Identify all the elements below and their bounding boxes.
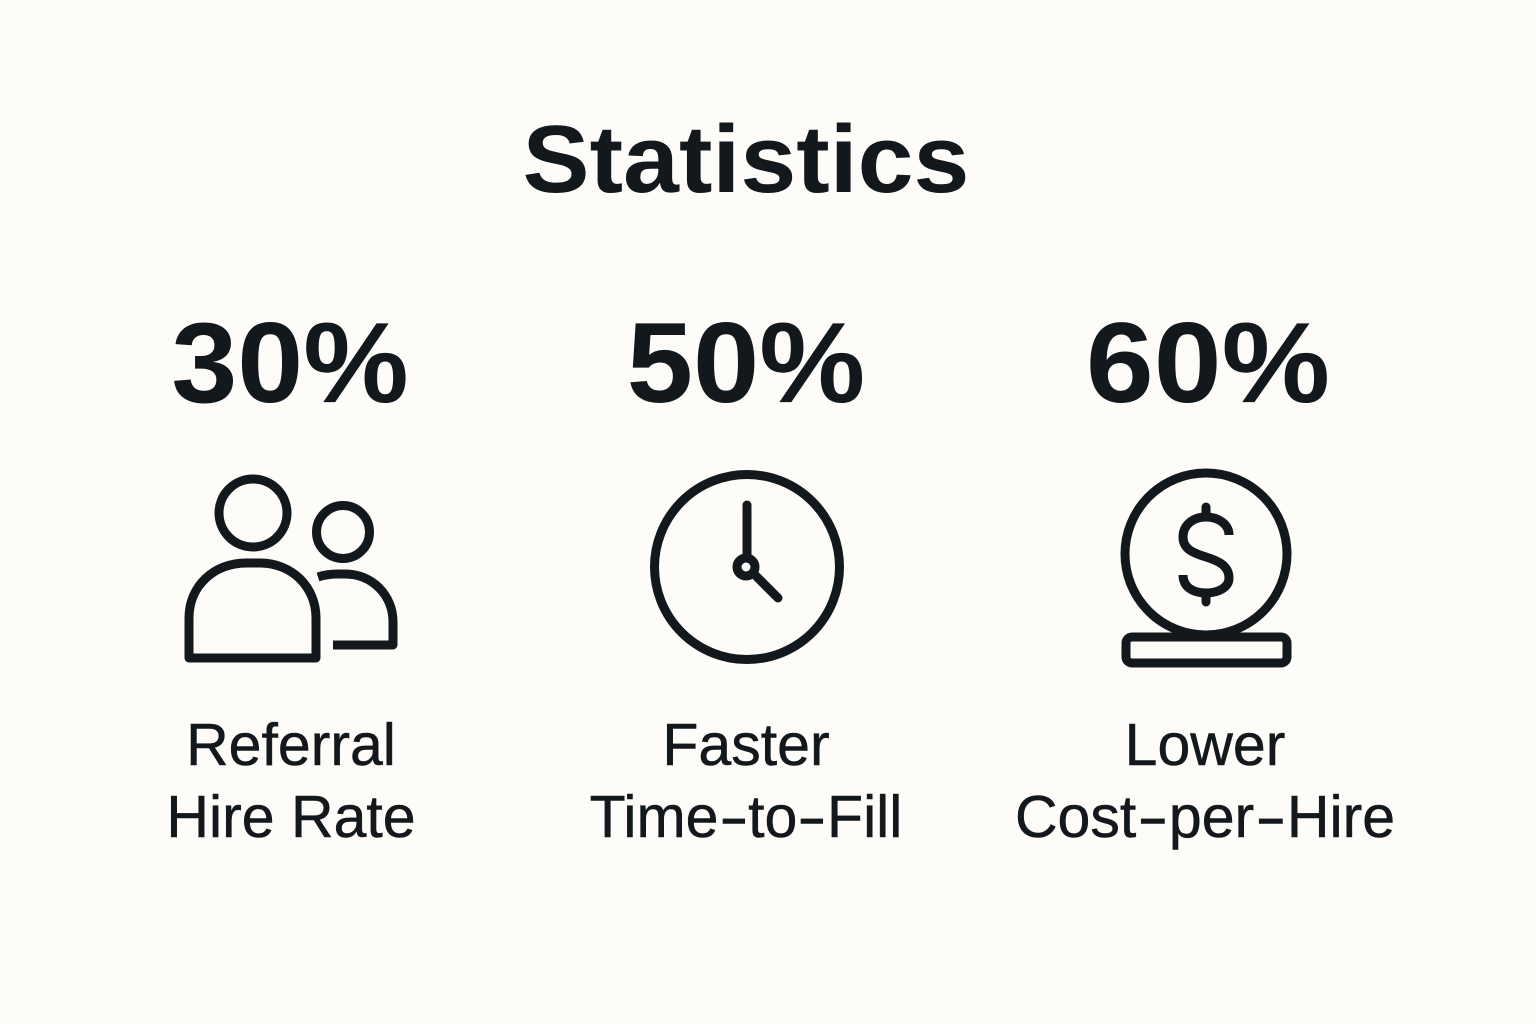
stat number: 60%: 60% [1086,300,1330,427]
stat number: 50%: 50% [627,300,865,427]
label: Lower Cost-per-Hire: Lower [1125,712,1285,778]
label: Faster Time-to-Fill [590,712,902,850]
label: Referral Hire Rate [166,712,416,850]
label: Lower Cost-per-Hire: - [1255,784,1286,850]
label: Faster Time-to-Fill: - [719,784,748,850]
label: Faster Time-to-Fill: Faster [662,712,830,778]
label: Lower Cost-per-Hire: Cost per Hire [1015,784,1395,850]
label: Referral Hire Rate: Referral [186,712,396,778]
label: Faster Time-to-Fill: - [797,784,827,850]
label: Referral Hire Rate: Hire Rate [166,784,416,850]
stat number: 30%: 30% [171,300,409,427]
title: Statistics [523,106,969,213]
label: Lower Cost-per-Hire: - [1137,784,1168,850]
label: Lower Cost-per-Hire [1015,712,1395,850]
label: Faster Time-to-Fill: Time to Fill [590,784,902,850]
